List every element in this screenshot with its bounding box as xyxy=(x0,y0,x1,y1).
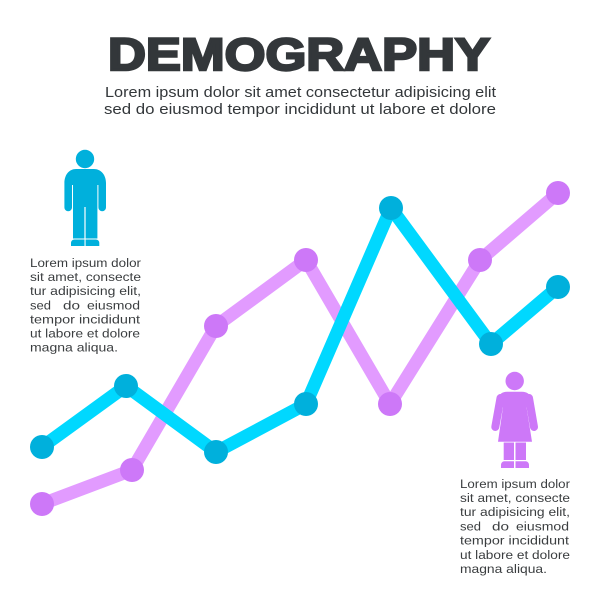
icon: female person xyxy=(495,372,534,468)
female text block xyxy=(460,477,570,576)
female text block: eiusmod xyxy=(516,519,569,533)
purple series line xyxy=(42,193,558,504)
cyan series points xyxy=(30,196,570,464)
male text block: do xyxy=(63,298,80,312)
female text block: ut labore et dolore xyxy=(460,548,570,562)
title: DEMOGRAPHY xyxy=(108,29,490,80)
male text block: sit amet, consecte xyxy=(30,270,141,284)
male text block: sed xyxy=(30,298,51,312)
male text block: tempor incididunt xyxy=(30,312,141,326)
subtitle: Lorem ipsum dolor sit amet consectetur adipisicing elit xyxy=(105,85,496,101)
female text block: do xyxy=(492,519,509,533)
female text block: Lorem ipsum dolor xyxy=(460,477,570,491)
male text block: tur adipisicing elit, xyxy=(30,284,141,298)
male text block: ut labore et dolore xyxy=(30,326,140,340)
male text block: Lorem ipsum dolor xyxy=(30,256,141,270)
female text block: tempor incididunt xyxy=(460,534,570,548)
purple series points xyxy=(30,181,570,516)
icon: male person xyxy=(64,150,106,246)
male text block: magna aliqua. xyxy=(30,341,118,355)
male text block xyxy=(30,256,141,355)
subtitle xyxy=(104,85,496,118)
female text block: magna aliqua. xyxy=(460,562,547,576)
male text block: eiusmod xyxy=(87,298,140,312)
subtitle: sed do eiusmod tempor incididunt ut labore et dolore xyxy=(104,102,496,118)
line chart xyxy=(30,181,570,516)
female text block: sed xyxy=(460,519,481,533)
cyan series line xyxy=(42,208,558,452)
female text block: sit amet, consecte xyxy=(460,491,570,505)
female text block: tur adipisicing elit, xyxy=(460,505,570,519)
